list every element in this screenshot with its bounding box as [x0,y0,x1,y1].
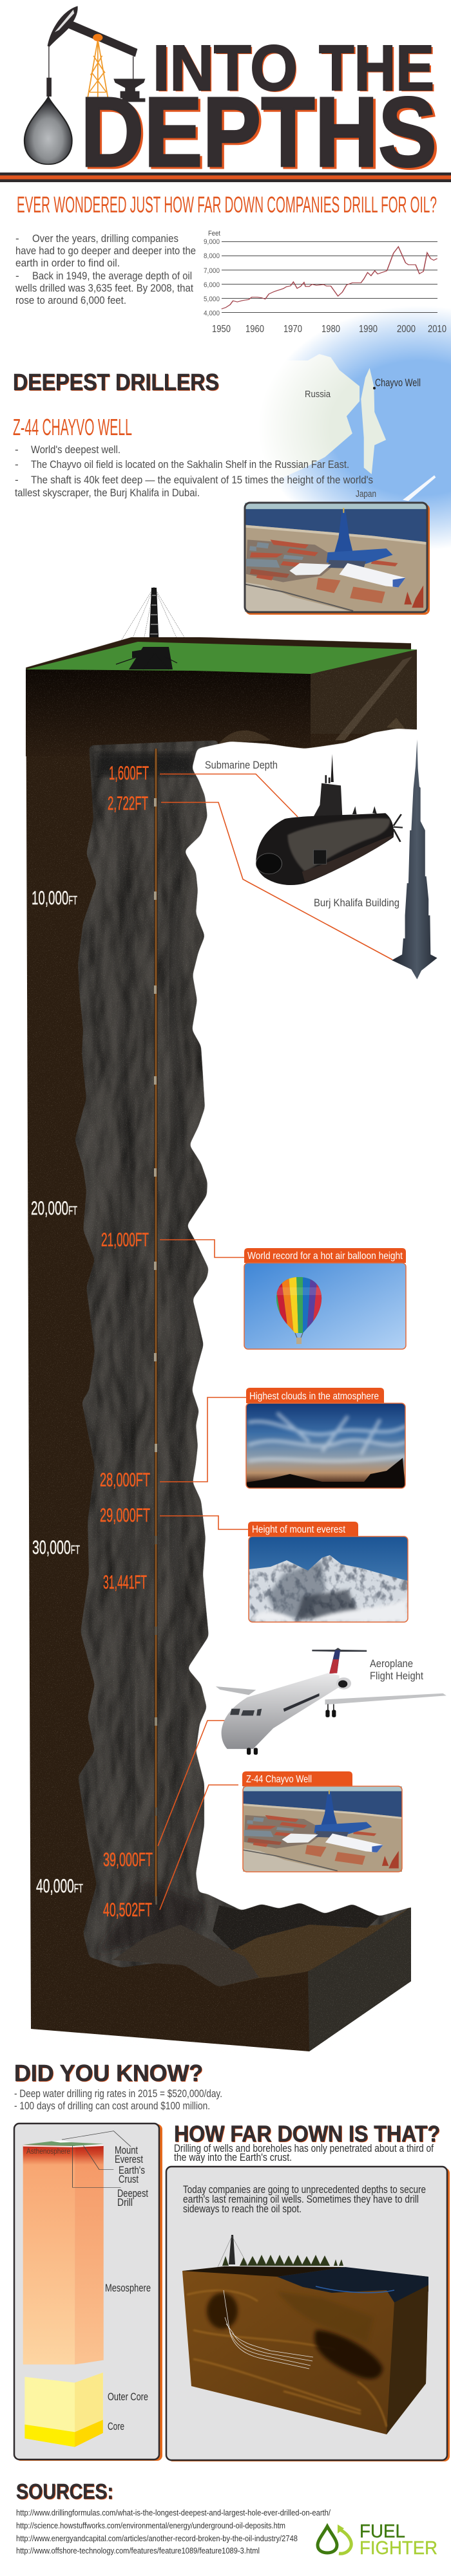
icon: oil pumpjack with oil drop [24,6,145,164]
intro text block: rose to around 6,000 feet. [15,294,126,306]
source links: http://www.offshore-technology.com/features/feature1089/feature1089-3.html [16,2546,260,2555]
depth label: 30,000ft: 30,000FT [32,1537,80,1558]
line chart: average well depth: 1970 [283,324,302,335]
layer labels [105,2144,151,2432]
line chart: average well depth: 1980 [321,324,340,335]
logo: fuel fighter: FIGHTER [360,2538,437,2559]
title: into the depths: THE [319,32,434,104]
line chart: average well depth [204,230,446,335]
panel paragraph: sideways to reach the oil spot. [183,2203,302,2215]
line chart: average well depth: 1990 [359,324,378,335]
illustration: submarine [256,754,403,885]
layer labels: Mesosphere [105,2282,151,2294]
depth label: 29,000ft: 29,000FT [100,1505,150,1526]
chayvo facts text: - [15,443,19,456]
lower right face [308,1907,411,2051]
title rule [0,173,451,182]
line chart: average well depth: 1950 [212,324,231,335]
illustration: oil reservoir block [182,2235,428,2434]
source links: http://science.howstuffworks.com/environmental/energy/underground-oil-deposits.htm [16,2521,285,2530]
map background [278,310,451,546]
upper front shade [26,669,311,756]
chayvo facts text: tallest skyscraper, the Burj Khalifa in Dubai. [15,487,200,499]
map background: Chayvo Well [375,377,421,389]
photo: chayvo rig [245,503,430,615]
depth label: 31,441ft: 31,441FT [103,1572,147,1593]
intro text block [15,232,196,306]
panel paragraph [183,2183,426,2215]
title: into the depths: INTO [153,32,298,104]
oil pipe [154,749,157,1905]
chayvo facts text: The shaft is 40k feet deep — the equivalent of 15 times the height of the world's [31,474,373,486]
how far down text: the way into the Earth's crust. [174,2151,292,2163]
card: mount everest [248,1522,408,1622]
chayvo facts text: The Chayvo oil field is located on the Sakhalin Shelf in the Russian Far East. [31,458,349,471]
card: hot air balloon [244,1248,406,1349]
heading: did you know: DID YOU KNOW? [15,2060,204,2087]
line chart: average well depth: 2010 [428,324,446,335]
line chart: average well depth: 5,000 [204,295,220,303]
intro text block: earth in order to find oil. [15,257,120,269]
depth label: 40,502ft: 40,502FT [103,1899,152,1921]
card: highest clouds: Highest clouds in the atmosphere [249,1391,379,1402]
intro text block: - [15,270,19,282]
line chart: average well depth: 7,000 [204,267,220,275]
source links: http://www.energyandcapital.com/articles/another-record-broken-by-the-oil-industry/2748 [16,2534,298,2543]
heading: sources: SOURCES: [17,2480,114,2504]
subheading: z-44 chayvo well: Z-44 CHAYVO WELL [13,414,132,440]
logo: fuel fighter [318,2521,437,2559]
label: aeroplane flight height: Flight Height [370,1670,423,1682]
green surface [26,642,419,675]
layer labels: Earth's [119,2164,145,2176]
connector lines [158,774,392,1910]
did you know facts: - 100 days of drilling can cost around $100 million. [14,2100,210,2112]
floor brown mud [228,1910,407,1985]
chayvo facts text: World's deepest well. [31,443,120,456]
intro text block: have had to go deeper and deeper into the [15,245,196,257]
card: z-44 chayvo well: Z-44 Chayvo Well [246,1774,312,1785]
line chart: average well depth: 4,000 [204,310,220,317]
heading: deepest drillers: DEEPEST DRILLERS [14,369,220,396]
intro text block: Over the years, drilling companies [32,232,178,245]
depth label: 10,000ft: 10,000FT [32,888,77,909]
intro text block: Back in 1949, the average depth of oil [32,270,192,282]
card: z-44 chayvo well [242,1771,402,1872]
icon: balloon [276,1277,322,1344]
did you know facts: - Deep water drilling rig rates in 2015 = $520,000/day. [14,2087,222,2100]
leader lines [62,2131,131,2187]
label: aeroplane flight height: Aeroplane [370,1657,413,1670]
illustration: burj khalifa [392,740,437,979]
line chart: average well depth: 8,000 [204,252,220,260]
depth label: 20,000ft: 20,000FT [31,1198,77,1219]
title: into the depths [81,32,439,189]
line chart: average well depth: 2000 [397,324,416,335]
layer labels: Deepest [117,2187,148,2199]
card: mount everest: Height of mount everest [252,1524,345,1535]
line chart: average well depth: 9,000 [204,238,220,246]
depth label: 21,000ft: 21,000FT [101,1229,149,1251]
line chart: average well depth: 1960 [245,324,264,335]
chayvo facts text: - [15,458,19,471]
depth label: 39,000ft: 39,000FT [103,1849,153,1871]
panel: earth layers [14,2123,162,2461]
upper right face [311,649,417,734]
heading: did you know: DID YOU KNOW? [14,2060,203,2086]
chayvo facts text: - [15,474,19,486]
intro text block: wells drilled was 3,635 feet. By 2008, that [15,282,193,294]
illustration: aeroplane [216,1648,446,1755]
heading: sources: SOURCES: [16,2479,113,2503]
map background: Japan [356,489,376,499]
depth label: 1,600ft: 1,600FT [109,763,149,784]
line chart: average well depth: Feet [208,230,220,238]
label: aeroplane flight height [370,1657,423,1682]
earth column [23,2140,104,2454]
card: highest clouds [246,1388,406,1488]
card: hot air balloon: World record for a hot air balloon height [247,1251,403,1262]
logo: fuel fighter: FUEL [360,2521,405,2542]
layer labels: Everest [115,2153,143,2165]
depth label: 28,000ft: 28,000FT [100,1470,150,1491]
layer labels: Mount [115,2144,138,2156]
cross-section block of earth [26,637,417,2051]
layer labels: Drill [117,2196,133,2208]
label: submarine depth: Submarine Depth [205,759,278,771]
label: burj khalifa building: Burj Khalifa Building [314,897,399,909]
line chart: average well depth: 6,000 [204,281,220,289]
left and lower edge trim [19,643,425,2060]
layer labels: Core [108,2420,124,2432]
source links [16,2508,331,2555]
panel: earth layers: Asthenosphere [26,2147,70,2156]
source links: http://www.drillingformulas.com/what-is-the-longest-deepest-and-largest-hole-ever-drilled-on-earth/ [16,2508,331,2517]
title: into the depths: THE [321,33,436,106]
icon: drilling rig on surface [119,587,188,650]
title: into the depths: INTO [155,33,299,106]
chayvo facts text [15,443,373,499]
map background: Russia [305,389,331,400]
layer labels: Crust [119,2173,139,2185]
speckle texture [26,669,419,2053]
layer labels: Outer Core [108,2391,148,2403]
rock shaft [64,740,425,1995]
intro text block: - [15,232,19,245]
depth label: 2,722ft: 2,722FT [108,793,148,814]
heading: deepest drillers: DEEPEST DRILLERS [13,369,219,395]
how far down text [174,2142,434,2163]
panel: how far down [166,2167,450,2461]
depth label: 40,000ft: 40,000FT [36,1876,83,1897]
did you know facts [14,2087,222,2112]
